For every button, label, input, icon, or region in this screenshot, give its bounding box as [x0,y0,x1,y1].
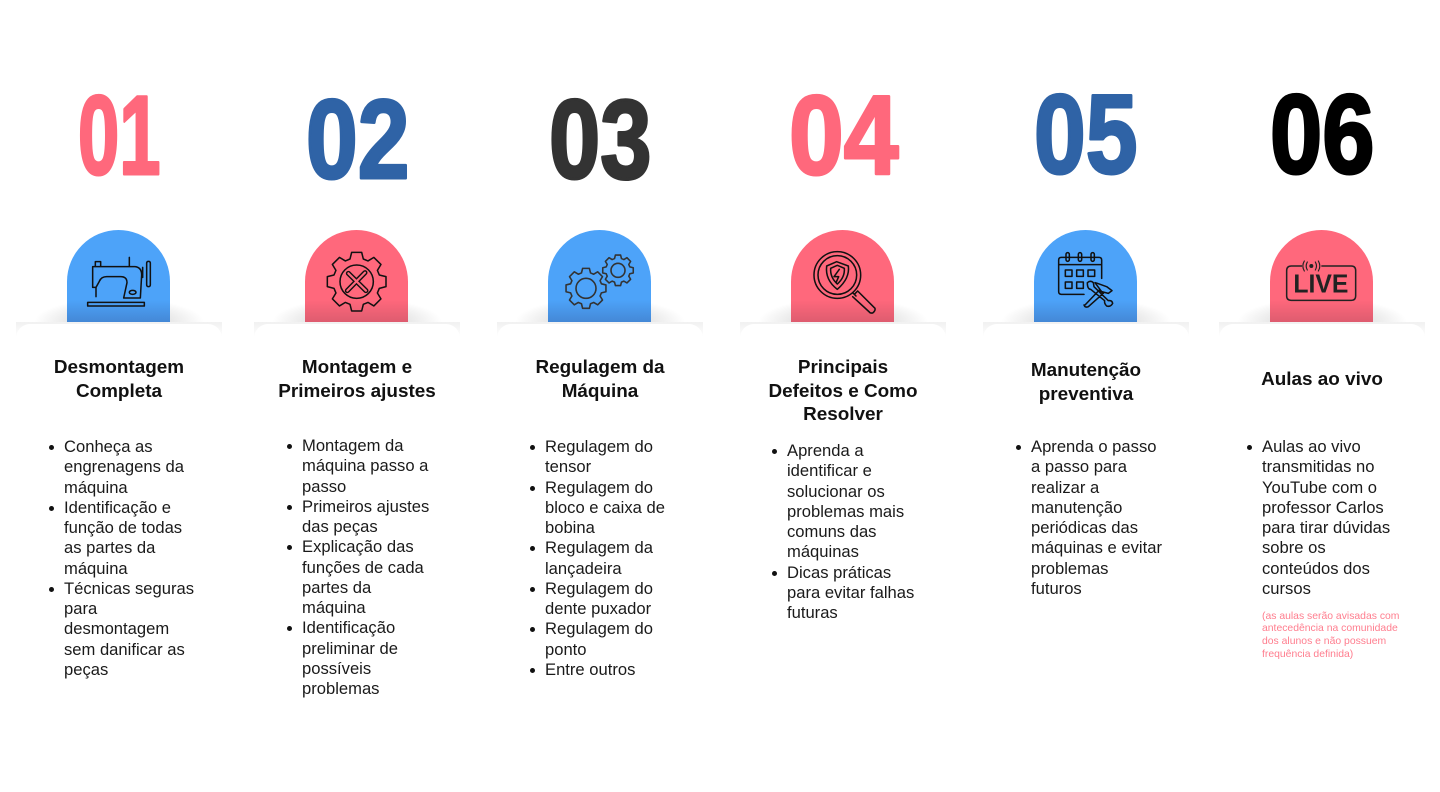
panel: step 02 [254,77,460,698]
bullet list: engrenagens da [64,457,184,476]
bullet list: Aprenda o passo [1031,437,1156,456]
panel: step 04 [740,73,946,622]
bullet list [49,437,194,679]
bullet list [1016,437,1162,598]
bullet list: sem danificar as [64,640,185,658]
bullet list: Primeiros ajustes [302,497,429,516]
icon: live badge: LIVE [1293,268,1348,298]
bullet list: possíveis [302,659,371,678]
bullet list: problemas [302,679,379,698]
heading [278,357,436,402]
bullet list [1247,437,1390,598]
bullet list: máquina [302,598,366,617]
bullet list: Aprenda a [787,441,864,460]
heading [1031,360,1141,404]
bullet list: Identificação e [64,498,171,517]
bullet list: das peças [302,517,378,536]
bullet list: problemas mais [787,502,904,521]
heading: Manutenção [1031,360,1141,381]
bullet list: Regulagem da [545,538,653,557]
bullet list: máquinas [787,542,859,561]
bullet list: sobre os [1262,538,1326,557]
bullet list: máquinas e evitar [1031,538,1162,557]
bullet list: bloco e caixa de [545,498,665,517]
heading: Resolver [803,404,883,425]
bullet list: preliminar de [302,638,398,658]
heading: preventiva [1039,384,1133,404]
bullet list: identificar e [787,461,872,480]
bullet list: Regulagem do [545,619,653,638]
panel: step 03 [497,77,703,679]
note [1262,610,1399,660]
panel: step 06 [1219,72,1425,660]
bullet list: realizar a [1031,478,1099,496]
bullet list: Regulagem do [545,437,653,456]
number 01: 01 [78,73,160,198]
bullet list: Montagem da [302,436,403,455]
heading: Principais [798,357,888,378]
note: (as aulas serão avisadas com [1262,610,1399,622]
bullet list: ponto [545,640,587,658]
bullet list: periódicas das [1031,518,1138,537]
heading [535,357,665,402]
bullet list: a passo para [1031,457,1127,476]
bullet list: professor Carlos [1262,498,1384,517]
bullet list: tensor [545,457,591,476]
bullet list [287,436,429,698]
number 05: 05 [1034,72,1138,197]
bullet list: futuros [1031,579,1082,598]
panel: step 01 [16,73,222,679]
bullet list: manutenção [1031,498,1122,517]
bullet list: Aulas ao vivo [1262,437,1361,456]
number 02: 02 [306,77,410,202]
card base [16,322,222,338]
bullet list: Identificação [302,618,395,637]
bullet list: comuns das [787,522,876,541]
shadow under arch [1237,298,1407,322]
bullet list: para evitar falhas [787,583,914,602]
bullet list: conteúdos dos [1262,558,1370,578]
bullet list: função de todas [64,518,182,537]
heading: Montagem e [302,357,412,378]
bullet list: problemas [1031,558,1108,578]
bullet list: bobina [545,518,595,537]
bullet list: para [64,599,97,618]
bullet list: Regulagem do [545,579,653,598]
bullet list: Dicas práticas [787,562,891,582]
icon: gear with tools [305,230,408,322]
shadow under arch [515,298,685,322]
bullet list: Regulagem do [545,478,653,496]
bullet list: dente puxador [545,599,651,618]
card base [740,322,946,338]
bullet list: funções de cada [302,558,424,576]
panel: step 05 [983,72,1189,598]
number 04: 04 [789,73,898,198]
bullet list: as partes da [64,538,155,557]
note: antecedência na comunidade [1262,623,1398,634]
shadow under arch [34,298,204,322]
card base [497,322,703,338]
bullet list: Conheça as [64,437,153,456]
bullet list: Entre outros [545,660,635,679]
bullet list: YouTube com o [1262,478,1377,496]
heading: Regulagem da [535,357,665,378]
bullet list [772,441,914,622]
bullet list: lançadeira [545,558,622,578]
shadow under arch [758,298,928,322]
bullet list [530,437,665,679]
bullet list: Explicação das [302,537,414,556]
heading: Desmontagem [54,357,184,378]
bullet list: partes da [302,578,371,597]
icon: magnifier over shield [791,230,894,322]
note: frequência definida) [1262,649,1353,660]
bullet list: Técnicas seguras [64,579,194,598]
bullet list: desmontagem [64,619,169,638]
bullet list: máquina [64,558,128,578]
bullet list: cursos [1262,579,1311,598]
heading: Primeiros ajustes [278,380,436,402]
heading [768,357,918,425]
heading: Completa [76,380,162,402]
heading: Aulas ao vivo [1261,369,1383,390]
bullet list: para tirar dúvidas [1262,518,1390,537]
number 06: 06 [1270,72,1374,197]
heading [54,357,184,402]
icon: calendar and tools [1034,230,1137,322]
card base [254,322,460,338]
bullet list: peças [64,660,108,679]
bullet list: máquina [64,478,128,496]
bullet list: máquina passo a [302,456,428,475]
card base [983,322,1189,338]
bullet list: transmitidas no [1262,457,1375,476]
card base [1219,322,1425,338]
shadow under arch [1001,298,1171,322]
note: dos alunos e não possuem [1262,636,1386,647]
bullet list: futuras [787,603,838,622]
bullet list: solucionar os [787,482,885,500]
bullet list: passo [302,476,346,496]
heading: Máquina [562,380,638,402]
number 03: 03 [549,77,652,202]
heading: Defeitos e Como [768,380,918,402]
icon: live badge [1270,230,1373,322]
icon: sewing machine [67,230,170,322]
icon: two gears [548,230,651,322]
shadow under arch [272,298,442,322]
